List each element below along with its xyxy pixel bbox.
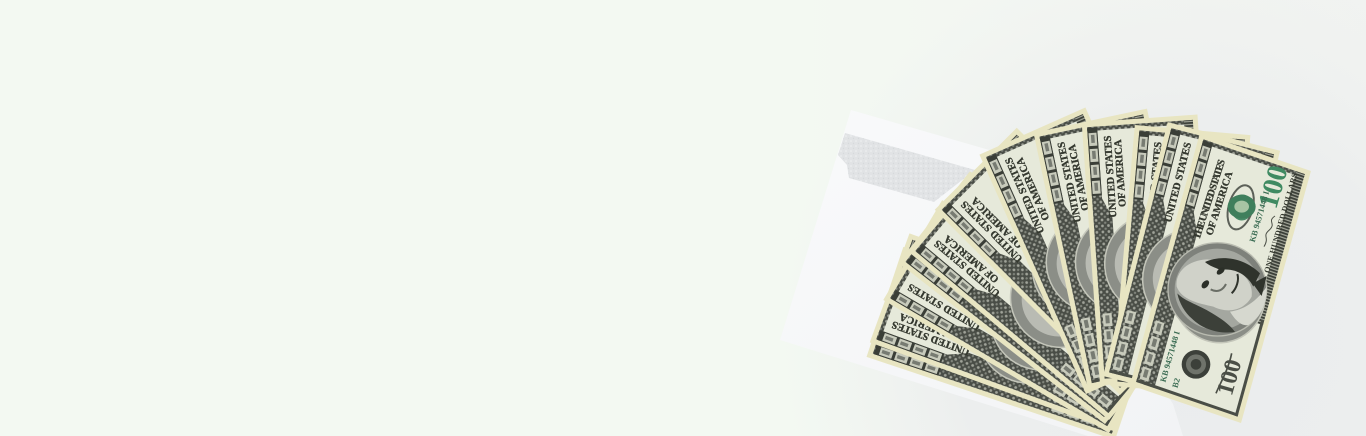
bill 8: UNITED STATES xyxy=(932,237,1003,299)
bill 8 xyxy=(908,163,1184,420)
legend: of america: OF AMERICA xyxy=(1204,170,1236,237)
background: soft grey surface xyxy=(760,0,1366,436)
bill 7: OF AMERICA xyxy=(969,194,1025,250)
portrait hair lower xyxy=(1177,293,1235,332)
corner hundred: 100 xyxy=(1212,357,1247,398)
bill 4: UNITED STATES xyxy=(1103,135,1119,218)
fan of bills xyxy=(867,107,1311,436)
bill 7 xyxy=(935,128,1202,395)
portrait collar xyxy=(1230,287,1267,325)
bill 11 xyxy=(870,233,1156,432)
legend: united states: THE UNITED STATES xyxy=(1192,158,1228,241)
green denomination: 100 xyxy=(1252,162,1295,212)
serial number lower: KB 94571448 I xyxy=(1159,330,1182,383)
bill 4: OF AMERICA xyxy=(1113,139,1129,207)
bill 7: UNITED STATES xyxy=(959,198,1025,264)
bill 6: OF AMERICA xyxy=(1015,155,1052,222)
bill 8: OF AMERICA xyxy=(942,232,1001,285)
bill 5: OF AMERICA xyxy=(1067,143,1092,212)
bill 6 xyxy=(979,107,1192,394)
portrait eye left xyxy=(1200,279,1211,290)
signature lower xyxy=(1216,353,1232,393)
bill 11: UNITED STATES xyxy=(890,318,972,357)
portrait nose xyxy=(1211,284,1226,291)
portrait hair top xyxy=(1205,258,1260,287)
bill 2: UNITED STATES xyxy=(1163,141,1194,224)
bill 6: UNITED STATES xyxy=(1004,155,1047,235)
bill 1: top bill base xyxy=(1130,133,1311,423)
bill 1: top bill details xyxy=(1159,158,1300,398)
bill 2 xyxy=(1103,122,1280,405)
envelope xyxy=(780,110,1183,436)
serial number upper: KB 94571448 I xyxy=(1248,190,1271,243)
portrait coat xyxy=(1253,276,1267,296)
bill 5 xyxy=(1034,109,1201,389)
green seal with hundred watermark xyxy=(1223,182,1258,232)
signature xyxy=(1264,216,1275,247)
bill 10: UNITED STATES xyxy=(906,281,983,332)
bill 10 xyxy=(883,200,1168,433)
band text: ONE HUNDRED DOLLARS xyxy=(1262,172,1300,274)
bill 3: UNITED STATES xyxy=(1146,141,1164,224)
bill 3 xyxy=(1112,125,1250,396)
black seal xyxy=(1182,350,1210,379)
portrait mouth xyxy=(1232,274,1238,293)
portrait face xyxy=(1177,259,1252,310)
bill 4 xyxy=(1082,115,1216,384)
portrait eye right xyxy=(1215,266,1226,276)
bill 5: UNITED STATES xyxy=(1056,141,1084,223)
bill 9: UNITED STATES xyxy=(922,247,994,307)
envelope window band xyxy=(838,133,975,202)
bill 9 xyxy=(899,171,1176,424)
bill 12 xyxy=(867,247,1152,436)
series code: B2 xyxy=(1171,377,1182,389)
bill 11: OF AMERICA xyxy=(898,310,966,344)
portrait oval xyxy=(1168,243,1267,336)
